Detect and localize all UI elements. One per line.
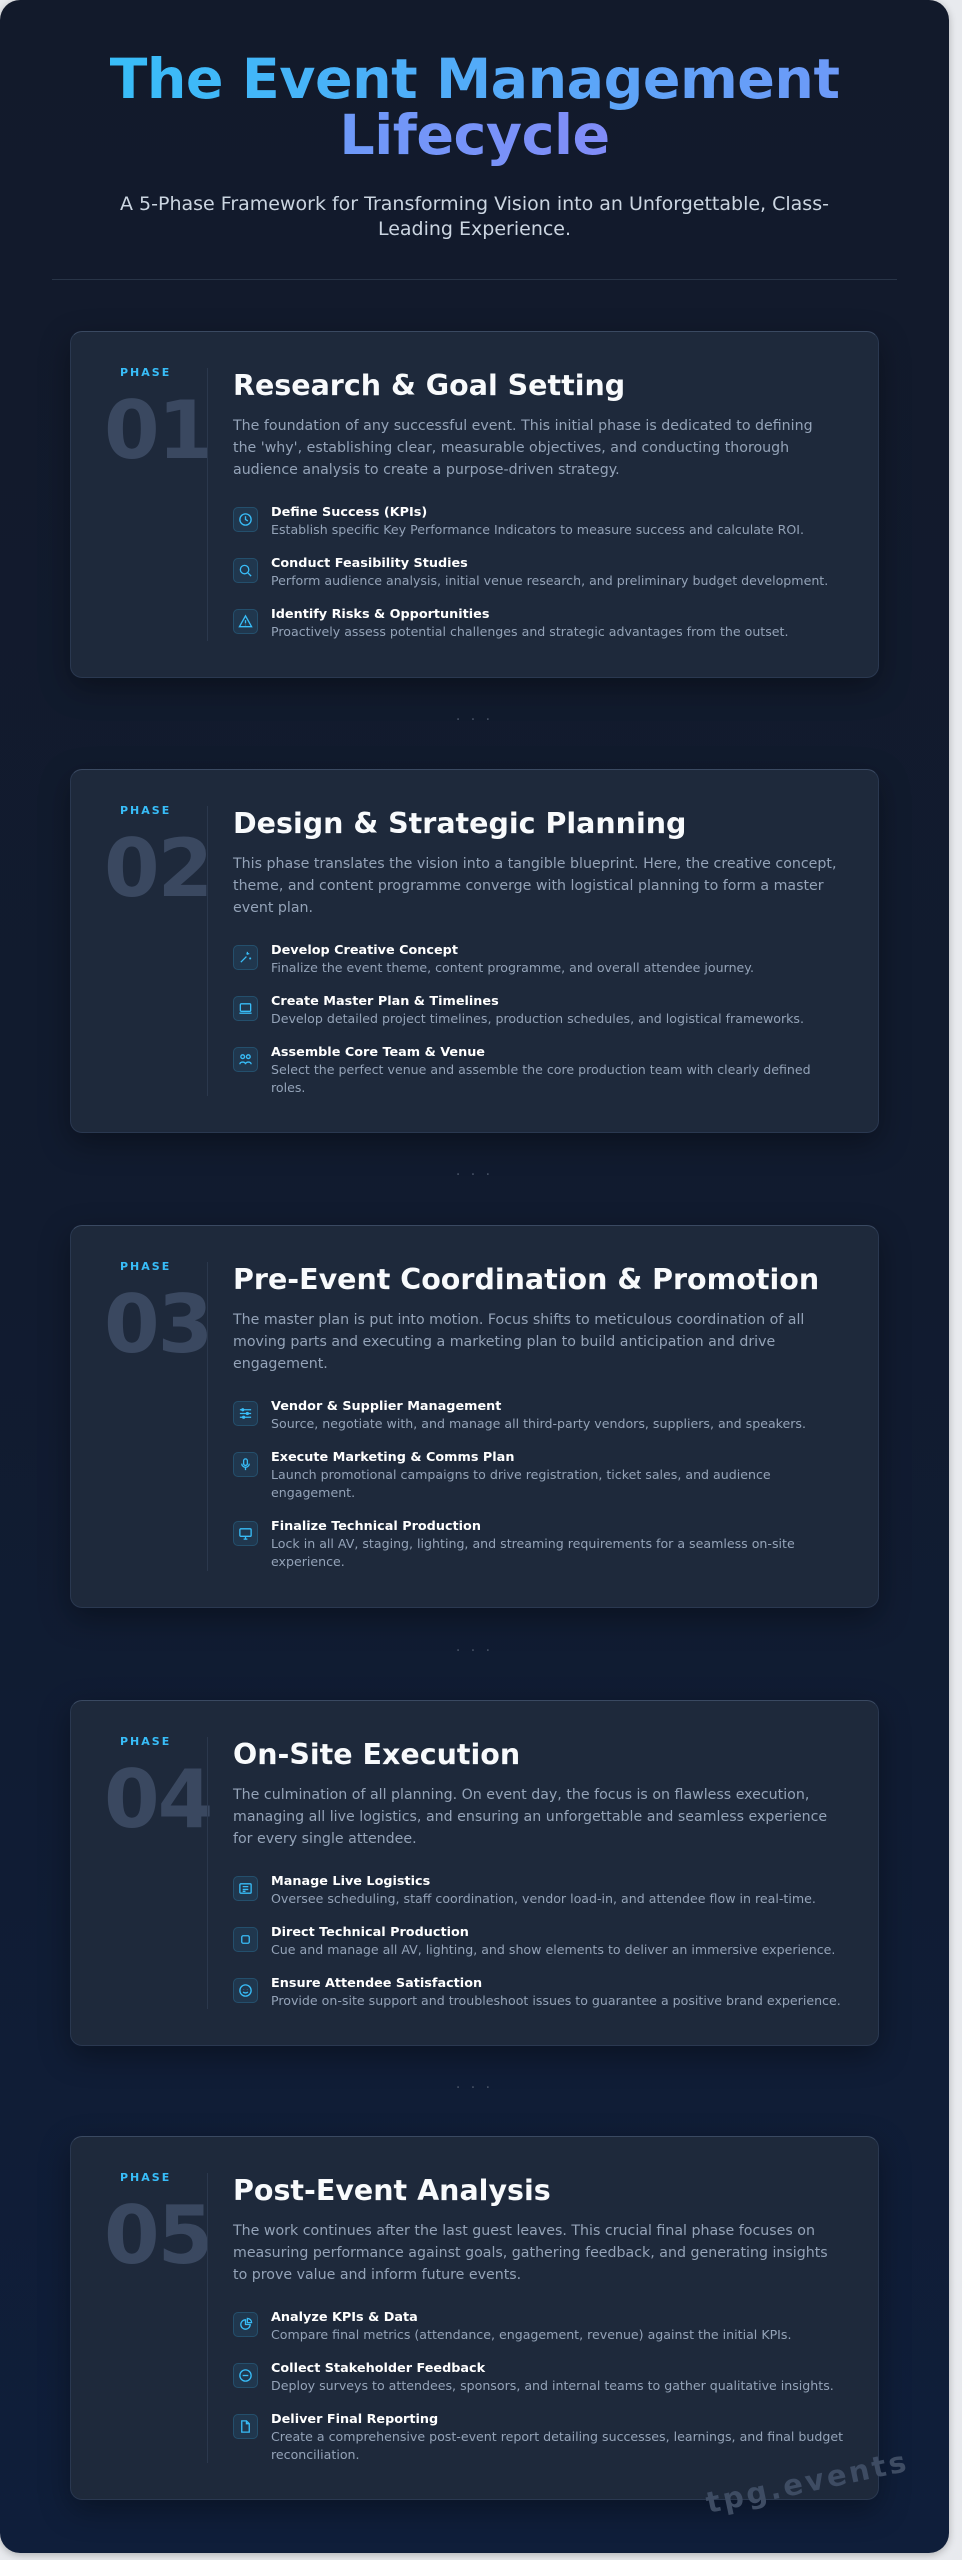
connector dots: · · · [456, 1167, 493, 1183]
item: marketing: Execute Marketing & Comms Plan [271, 1450, 514, 1465]
item: feedback: Deploy surveys to attendees, sponsors, and internal teams to gather qualitative insights. [271, 2378, 834, 2393]
item: core team [233, 1045, 811, 1095]
description: This phase translates the vision into a tangible blueprint. Here, the creative concept, [233, 856, 836, 872]
description [232, 856, 836, 916]
item list [233, 505, 828, 639]
item: KPIs [233, 2310, 791, 2342]
item: vendors [233, 1399, 806, 1431]
item: creative concept: Develop Creative Concept [271, 943, 458, 958]
subtitle: Leading Experience. [378, 218, 571, 240]
description [232, 418, 813, 478]
heading: Design & Strategic Planning [233, 807, 686, 840]
subtitle [120, 193, 829, 240]
item: logistics: Manage Live Logistics [271, 1874, 430, 1889]
item: satisfaction: Provide on-site support and troubleshoot issues to guarantee a positive brand experience. [271, 1993, 841, 2008]
item: feasibility: Perform audience analysis, initial venue research, and preliminary budget development. [271, 573, 828, 588]
panel: phase 02 [70, 769, 879, 1133]
heading: Pre-Event Coordination & Promotion [233, 1263, 819, 1296]
item: risks: Identify Risks & Opportunities [271, 607, 489, 622]
panel: phase 01 [70, 331, 879, 678]
description: The culmination of all planning. On event day, the focus is on flawless execution, managing all live logistics, and ensuring an unforgettable and seamless experience for every single attendee. [233, 1787, 827, 1847]
phase label: PHASE [120, 1735, 171, 1748]
description: The foundation of any successful event. This initial phase is dedicated to defining [233, 418, 813, 434]
phase content [232, 369, 828, 639]
item: vendors: Source, negotiate with, and manage all third-party vendors, suppliers, and speakers. [271, 1416, 806, 1431]
item: feasibility: Conduct Feasibility Studies [271, 556, 468, 571]
panel: phase 03 [70, 1225, 879, 1608]
phase number: 04 [104, 1753, 211, 1846]
item: technical: Direct Technical Production [271, 1925, 469, 1940]
item: feedback [233, 2361, 834, 2393]
item: technical: Lock in all AV, staging, lighting, and streaming requirements for a seamless on-site experience. [271, 1536, 795, 1569]
description: theme, and content programme converge with logistical planning to form a master event plan. [233, 878, 824, 916]
description: the 'why', establishing clear, measurable objectives, and conducting thorough audience analysis to create a purpose-driven strategy. [233, 440, 789, 478]
item: risks [233, 607, 788, 639]
item: technical: Finalize Technical Production [271, 1519, 481, 1534]
watermark: tpg.events [703, 2444, 912, 2520]
phase content [232, 1263, 819, 1569]
item: core team: Assemble Core Team & Venue [271, 1045, 485, 1060]
item list [233, 943, 811, 1095]
item: reporting: Deliver Final Reporting [271, 2412, 438, 2427]
title: Lifecycle [339, 103, 610, 168]
phase label: PHASE [120, 804, 171, 817]
item: logistics [233, 1874, 816, 1906]
connector dots: · · · [456, 712, 493, 728]
item: creative concept [233, 943, 754, 975]
item: marketing [233, 1450, 771, 1500]
item: define success: Define Success (KPIs) [271, 505, 427, 520]
item list [233, 1399, 806, 1569]
phase content [232, 1738, 841, 2008]
item: technical: Cue and manage all AV, lighting, and show elements to deliver an immersive experience. [271, 1942, 835, 1957]
phase number: 01 [104, 384, 211, 477]
phase content [232, 807, 836, 1095]
phase number: 03 [104, 1278, 211, 1371]
item: feasibility [233, 556, 828, 588]
item: KPIs: Compare final metrics (attendance, engagement, revenue) against the initial KPIs. [271, 2327, 791, 2342]
panel: phase 05 [70, 2136, 879, 2500]
title [110, 47, 839, 168]
item: master plan: Create Master Plan & Timelines [271, 994, 499, 1009]
item: master plan: Develop detailed project timelines, production schedules, and logistical frameworks. [271, 1011, 804, 1026]
item: satisfaction [233, 1976, 841, 2008]
panel: phase 04 [70, 1700, 879, 2046]
description: The work continues after the last guest leaves. This crucial final phase focuses on measuring performance against goals, gathering feedback, and generating insights to prove value and inform future events. [233, 2223, 828, 2283]
item: vendors: Vendor & Supplier Management [271, 1399, 501, 1414]
heading: Research & Goal Setting [233, 369, 625, 402]
item: risks: Proactively assess potential challenges and strategic advantages from the outset. [271, 624, 788, 639]
title: The Event Management [110, 47, 839, 112]
connector dots: · · · [456, 1643, 493, 1659]
item list [233, 2310, 843, 2462]
heading: On-Site Execution [233, 1738, 520, 1771]
item: KPIs: Analyze KPIs & Data [271, 2310, 418, 2325]
phase label: PHASE [120, 1260, 171, 1273]
item: reporting [233, 2412, 843, 2462]
item: core team: Select the perfect venue and assemble the core production team with clearly defined roles. [271, 1062, 811, 1095]
phase label: PHASE [120, 2171, 171, 2184]
item: marketing: Launch promotional campaigns to drive registration, ticket sales, and audience engagement. [271, 1467, 771, 1500]
item: satisfaction: Ensure Attendee Satisfaction [271, 1976, 482, 1991]
item: creative concept: Finalize the event theme, content programme, and overall attendee journey. [271, 960, 754, 975]
phase number: 02 [104, 822, 211, 915]
item: feedback: Collect Stakeholder Feedback [271, 2361, 485, 2376]
item: reporting: Create a comprehensive post-event report detailing successes, learnings, and final budget reconciliation. [271, 2429, 843, 2462]
item: define success: Establish specific Key Performance Indicators to measure success and calculate ROI. [271, 522, 804, 537]
description: The master plan is put into motion. Focus shifts to meticulous coordination of all moving parts and executing a marketing plan to build anticipation and drive engagement. [233, 1312, 804, 1372]
heading: Post-Event Analysis [233, 2174, 551, 2207]
phase content [232, 2174, 843, 2462]
item list [233, 1874, 841, 2008]
item: define success [233, 505, 804, 537]
item: technical [233, 1925, 835, 1957]
subtitle: A 5-Phase Framework for Transforming Vision into an Unforgettable, Class- [120, 193, 829, 215]
connector dots: · · · [456, 2080, 493, 2096]
item: technical [233, 1519, 795, 1569]
phase label: PHASE [120, 366, 171, 379]
phase number: 05 [104, 2189, 211, 2282]
item: master plan [233, 994, 804, 1026]
item: logistics: Oversee scheduling, staff coordination, vendor load-in, and attendee flow in real-time. [271, 1891, 816, 1906]
